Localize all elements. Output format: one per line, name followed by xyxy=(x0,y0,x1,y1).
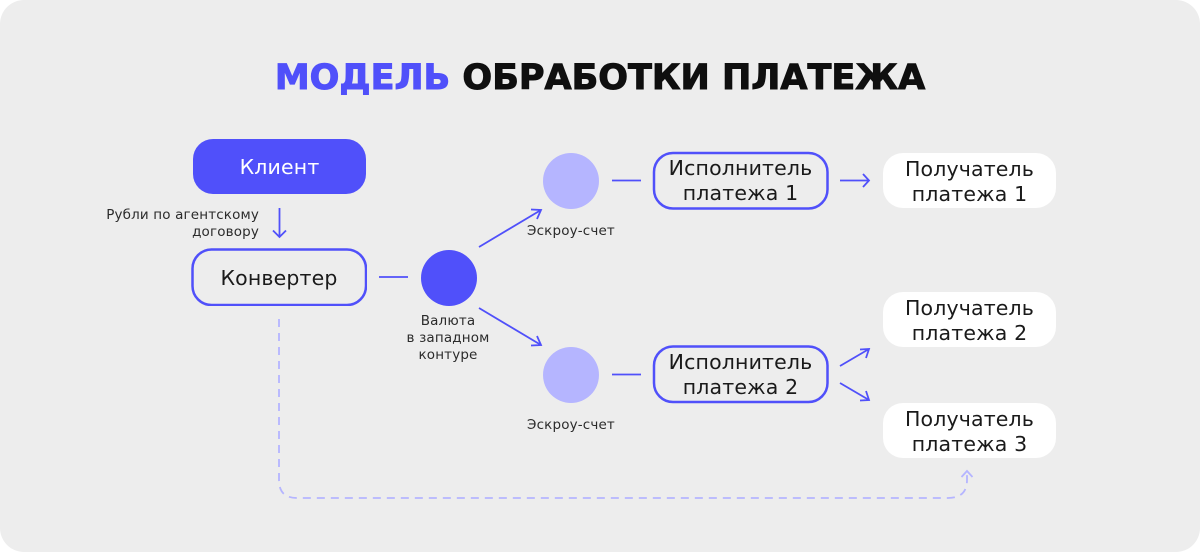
box: client xyxy=(193,139,366,194)
label: western currency: Валюта xyxy=(421,313,475,329)
label: western currency: в западном xyxy=(407,330,489,346)
label: escrow 1: Эскроу-счет xyxy=(527,223,615,239)
label: rubles xyxy=(106,207,259,240)
box: recipient 1: Получатель xyxy=(905,156,1034,180)
box: executor 2: платежа 2 xyxy=(683,375,798,399)
box: recipient 3: платежа 3 xyxy=(912,432,1027,456)
box: executor 2 xyxy=(652,345,829,404)
box: executor 1: платежа 1 xyxy=(683,181,798,205)
box: recipient 1: платежа 1 xyxy=(912,182,1027,206)
box: converter: Конвертер xyxy=(220,266,338,290)
circle: escrow 1 xyxy=(543,153,599,209)
label: rubles: договору xyxy=(192,224,259,240)
box: recipient 2: платежа 2 xyxy=(912,320,1027,344)
box: recipient 3: Получатель xyxy=(905,406,1034,430)
box: executor 1 xyxy=(652,152,829,210)
label: western currency: контуре xyxy=(418,347,478,363)
circle: escrow 2 xyxy=(543,347,599,403)
box: recipient 2: Получатель xyxy=(905,296,1034,320)
box: recipient 3 xyxy=(883,403,1056,458)
box: client: Клиент xyxy=(240,154,319,178)
label: escrow 2: Эскроу-счет xyxy=(527,417,615,433)
label: western currency xyxy=(407,313,489,363)
circle: western currency xyxy=(421,250,477,306)
box: recipient 1 xyxy=(883,153,1056,208)
title: МОДЕЛЬ ОБРАБОТКИ ПЛАТЕЖА xyxy=(275,58,925,98)
box: executor 2: Исполнитель xyxy=(669,350,812,374)
box: recipient 2 xyxy=(883,292,1056,347)
box: converter xyxy=(191,248,367,306)
box: executor 1: Исполнитель xyxy=(669,156,812,180)
label: rubles: Рубли по агентскому xyxy=(106,207,259,223)
